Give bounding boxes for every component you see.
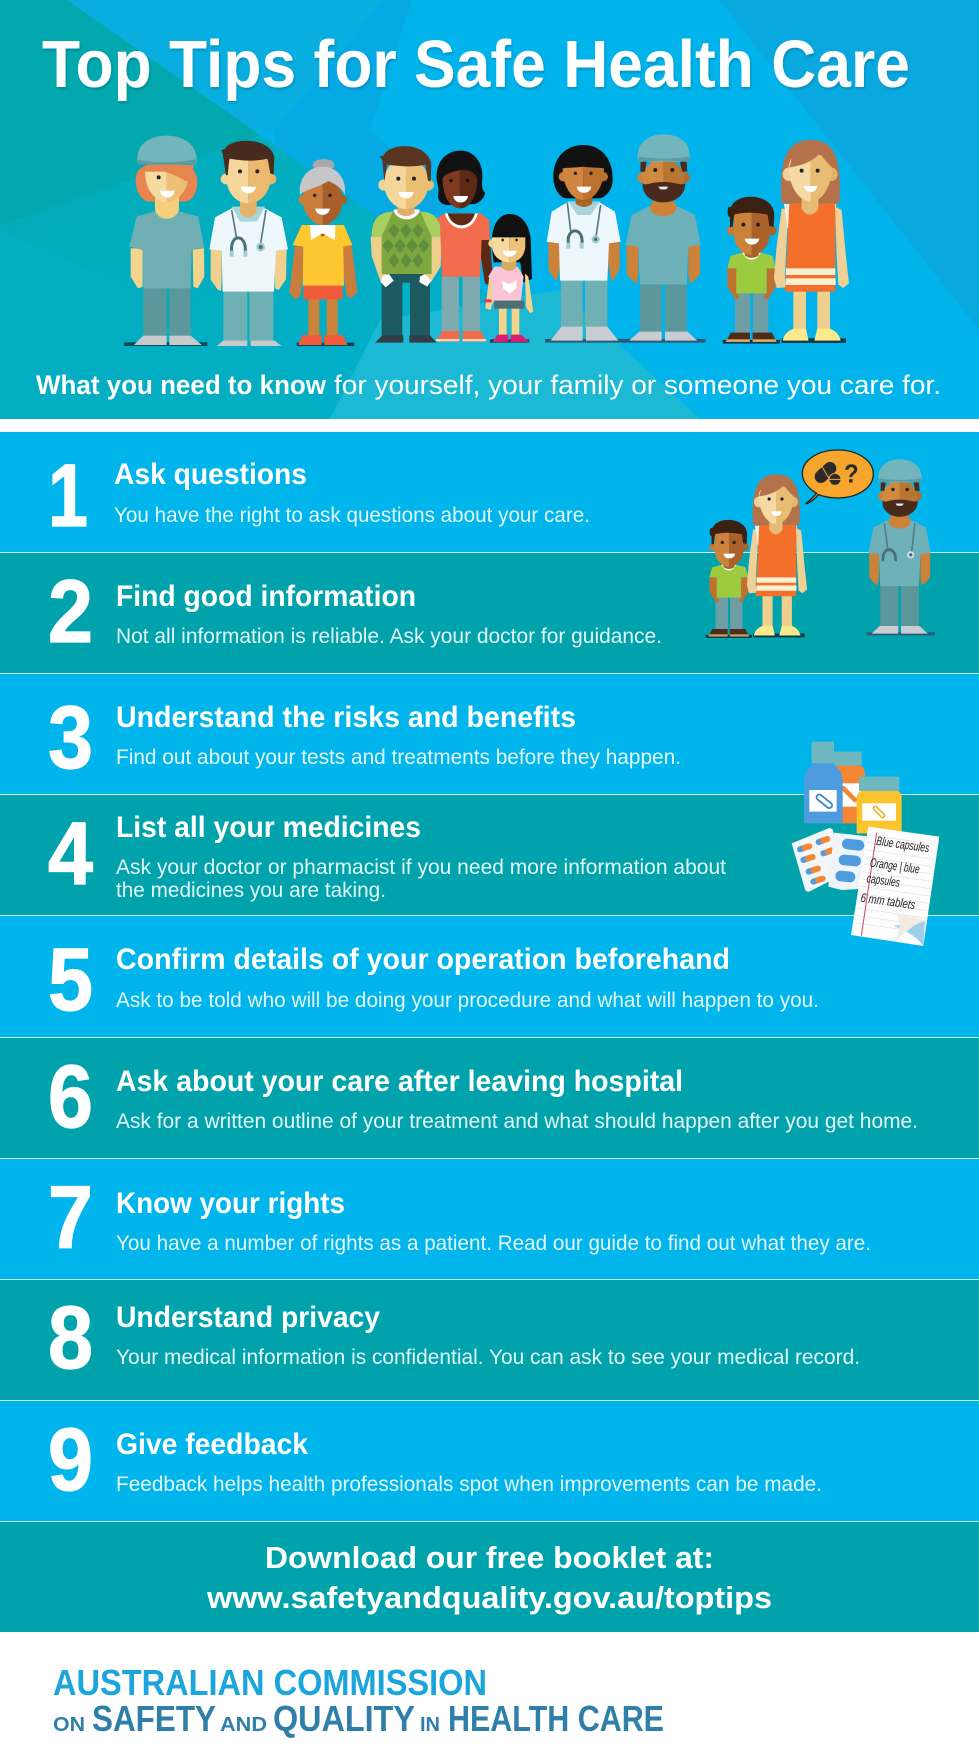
icon: capsule: [821, 466, 841, 485]
tip 2: 2: [48, 561, 93, 661]
tip 1: [48, 445, 590, 545]
illustration: patients asking doctor: [706, 450, 935, 638]
header background: [0, 0, 979, 419]
speech bubble: [802, 450, 873, 504]
download call to action: Download our free booklet at:: [265, 1540, 714, 1575]
tip 8: Your medical information is confidential. You can ask to see your medical record.: [116, 1346, 860, 1369]
subtitle: What you need to know: [36, 370, 327, 400]
tip 9: [48, 1409, 822, 1509]
logo: Australian Commission: QUALITY: [273, 1698, 415, 1739]
tip 5: [48, 929, 819, 1029]
tip 5: 5: [48, 929, 93, 1029]
title: Top Tips for Safe Health Care: [42, 27, 910, 102]
logo: Australian Commission: ON: [53, 1714, 85, 1736]
logo: Australian Commission: SAFETY: [92, 1698, 216, 1739]
tip 1: You have the right to ask questions about your care.: [114, 504, 590, 527]
tip 6: 6: [48, 1046, 93, 1146]
tip 2: [48, 561, 662, 661]
person: doctor: [866, 459, 935, 635]
tip bands: [0, 432, 979, 1632]
person: woman in coral top: [436, 151, 493, 342]
tip 3: Understand the risks and benefits: [116, 701, 576, 734]
icon: handwritten list: Blue capsules: [876, 834, 931, 855]
logo: Australian Commission: AND: [220, 1714, 267, 1736]
tip 9: Give feedback: [116, 1428, 308, 1461]
tip 1: 1: [48, 445, 88, 545]
subtitle: [36, 370, 941, 400]
person: bearded nurse: [623, 134, 706, 343]
tip 5: Ask to be told who will be doing your procedure and what will happen to you.: [116, 989, 819, 1012]
logo: Australian Commission: [53, 1662, 664, 1739]
tip 4: List all your medicines: [116, 811, 421, 844]
tip 9: Feedback helps health professionals spot when improvements can be made.: [116, 1473, 822, 1496]
tip 1: Ask questions: [114, 458, 307, 491]
tip 2: Find good information: [116, 580, 416, 613]
tip 7: [48, 1167, 871, 1267]
tip 7: 7: [48, 1167, 93, 1267]
tip 5: Confirm details of your operation beforehand: [116, 943, 730, 976]
icon: question mark: ?: [844, 459, 859, 489]
person: grandmother in yellow: [289, 159, 357, 346]
tip 8: [48, 1287, 860, 1387]
icon: blister pack left: [792, 828, 841, 892]
tip 4: Ask your doctor or pharmacist if you need more information about: [116, 856, 726, 879]
person: boy: [706, 520, 752, 638]
person: boy in green: [723, 197, 780, 344]
tip 3: Find out about your tests and treatments before they happen.: [116, 746, 681, 769]
logo: Australian Commission: IN: [420, 1714, 440, 1736]
tip 9: 9: [48, 1409, 93, 1509]
icon: handwritten list: Orange | blue: [869, 856, 921, 876]
tip 2: Not all information is reliable. Ask your doctor for guidance.: [116, 625, 662, 648]
icon: yellow bottle: [857, 777, 902, 833]
download call to action: www.safetyandquality.gov.au/toptips: [206, 1580, 772, 1615]
icon: handwritten list: [851, 827, 939, 946]
icon: blue bottle: [804, 742, 843, 823]
illustration: medicines and list: [792, 742, 939, 946]
icon: blister pack right: [828, 833, 870, 890]
logo: Australian Commission: HEALTH CARE: [448, 1698, 664, 1739]
tip 8: 8: [48, 1287, 93, 1387]
tip 4: [48, 803, 726, 903]
tip 7: Know your rights: [116, 1187, 345, 1220]
person: girl in pink: [484, 214, 533, 343]
icon: handwritten list: 6 mm tablets: [860, 891, 917, 912]
tip 8: Understand privacy: [116, 1301, 380, 1334]
tip 4: the medicines you are taking.: [116, 879, 386, 902]
tip 6: Ask for a written outline of your treatment and what should happen after you get home.: [116, 1110, 918, 1133]
tip 6: [48, 1046, 918, 1146]
person: nurse with red hair: [124, 136, 207, 346]
person: man in argyle vest: [371, 146, 442, 343]
person: woman: [747, 474, 807, 637]
logo: Australian Commission: AUSTRALIAN COMMISSION: [53, 1662, 487, 1703]
person: male doctor with stethoscope: [209, 141, 288, 346]
person: female doctor: [545, 145, 627, 343]
icon: handwritten list: capsules: [866, 871, 901, 890]
tip 7: You have a number of rights as a patient. Read our guide to find out what they are.: [116, 1232, 871, 1255]
tip 3: [48, 687, 681, 787]
download call to action: [206, 1540, 772, 1615]
icon: orange bottle: [834, 752, 865, 823]
tip 3: 3: [48, 687, 93, 787]
person: woman in orange dress: [774, 140, 849, 343]
tip 4: 4: [48, 803, 93, 903]
tip 6: Ask about your care after leaving hospital: [116, 1065, 683, 1098]
subtitle: for yourself, your family or someone you care for.: [334, 370, 941, 400]
